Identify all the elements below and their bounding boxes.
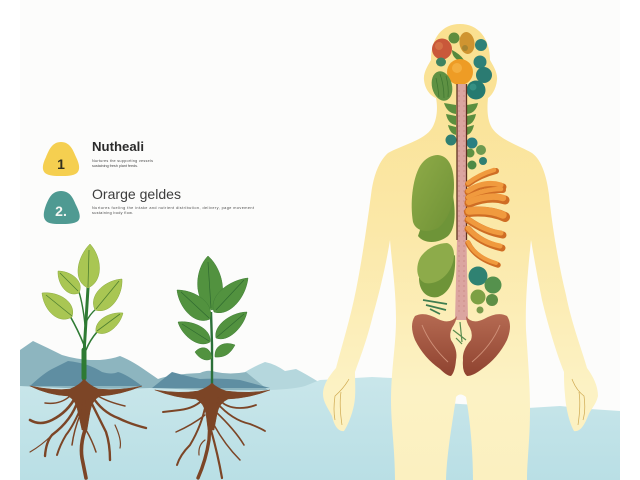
text block: item 2 description: Nurtures fueling the intake and nutrient distribution, delivery, page movement	[92, 206, 255, 210]
plant 2 stem	[211, 312, 212, 384]
heading: Nutheali: Nutheali	[92, 139, 144, 154]
green liver lobes	[412, 155, 455, 297]
icon: teal badge 2	[44, 191, 80, 224]
plant 2 leaves	[177, 256, 248, 360]
plant 1 leaf veins	[46, 250, 120, 331]
human body silhouette	[323, 24, 598, 480]
organs	[412, 31, 510, 376]
plant 1 leaves	[42, 244, 123, 334]
text block: item 1 description	[92, 159, 153, 168]
spine column	[455, 84, 468, 320]
landscape: mountains and water	[20, 341, 620, 480]
pelvis lobes	[412, 314, 510, 376]
text block: item 1 description: Nurtures the supporting vessels	[92, 159, 153, 163]
text block: item 2 description: sustaining body flow.	[92, 211, 133, 215]
neck leaf pairs	[444, 103, 478, 135]
text block: item 1 description: sustaining fresh plant feeds.	[92, 164, 138, 168]
icon: yellow badge 1: 1	[57, 156, 65, 172]
plant 2 roots	[155, 383, 270, 478]
plant 2	[155, 256, 270, 478]
plant 1 stem and branches	[70, 288, 97, 380]
chest produce cluster	[446, 134, 487, 170]
plant 2 leaf veins	[181, 262, 244, 341]
heading: Orarge geldes: Orarge geldes	[92, 186, 181, 202]
lower abdomen produce cluster	[423, 266, 502, 314]
legend item 2	[44, 186, 255, 224]
text block: item 2 description	[92, 206, 255, 215]
hand details	[334, 379, 585, 425]
head produce cluster	[429, 31, 492, 103]
plant 1	[30, 244, 146, 478]
plant 1 roots	[30, 379, 146, 478]
orange carrot organs	[468, 170, 505, 265]
icon: teal badge 2: 2.	[55, 203, 67, 219]
legend item 1	[43, 139, 153, 176]
